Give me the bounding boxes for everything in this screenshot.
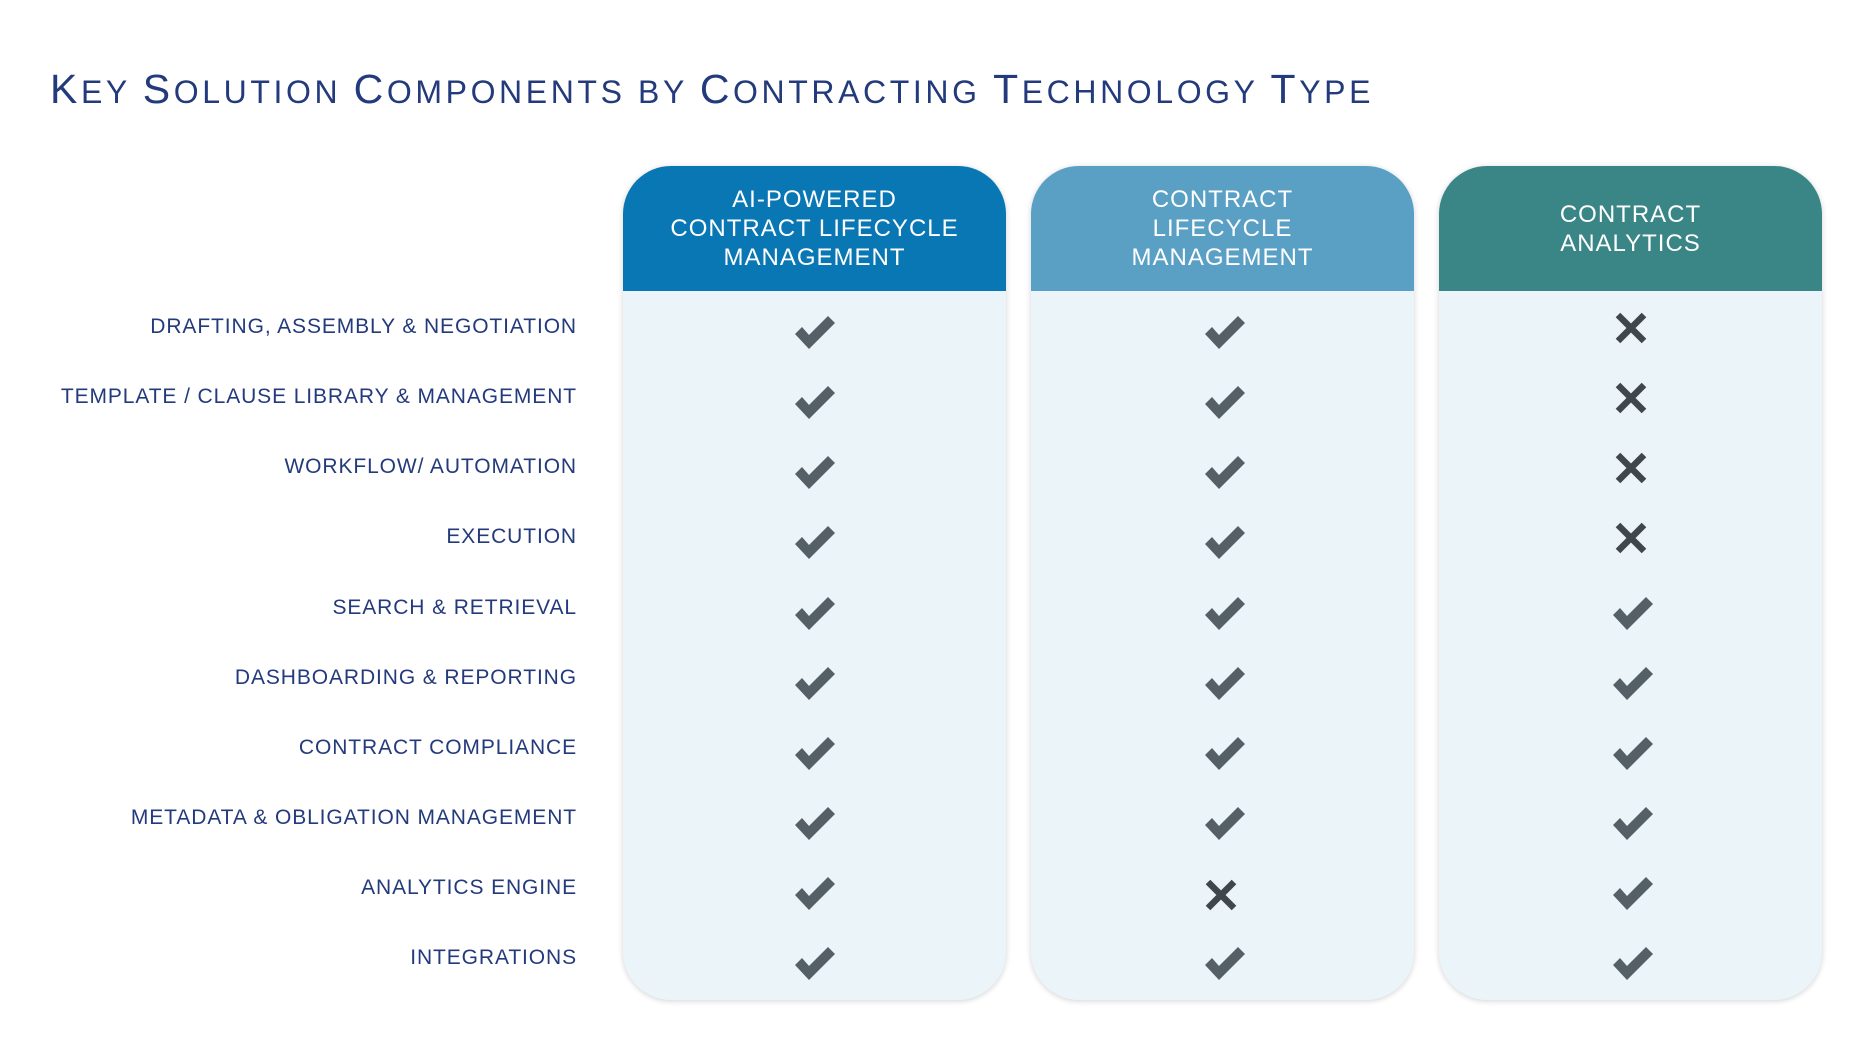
row labels: DASHBOARDING & REPORTING	[235, 666, 577, 689]
row labels: CONTRACT COMPLIANCE	[299, 736, 577, 759]
title: KEY SOLUTION COMPONENTS BY CONTRACTING TECHNOLOGY TYPE	[50, 66, 1374, 112]
panel: AI-powered CLM	[623, 166, 1006, 1000]
panel: CLM	[1031, 166, 1414, 1000]
panel: AI-powered CLM: CONTRACT LIFECYCLE	[670, 215, 959, 242]
row labels: DRAFTING, ASSEMBLY & NEGOTIATION	[150, 315, 577, 338]
panel: contract analytics: CONTRACT	[1560, 200, 1701, 228]
row labels: SEARCH & RETRIEVAL	[332, 596, 577, 619]
panel: AI-powered CLM: AI-POWERED	[732, 186, 897, 213]
panel: CLM: MANAGEMENT	[1131, 244, 1314, 271]
row labels: EXECUTION	[446, 525, 577, 548]
panel: CLM: LIFECYCLE	[1153, 215, 1292, 242]
row labels: WORKFLOW/ AUTOMATION	[284, 455, 577, 478]
row labels	[61, 315, 577, 969]
panel: CLM: CONTRACT	[1152, 186, 1293, 213]
row labels: INTEGRATIONS	[410, 946, 577, 969]
panel: contract analytics: ANALYTICS	[1560, 230, 1701, 256]
panel: AI-powered CLM: MANAGEMENT	[723, 244, 906, 271]
row labels: ANALYTICS ENGINE	[361, 876, 577, 899]
row labels: TEMPLATE / CLAUSE LIBRARY & MANAGEMENT	[61, 385, 577, 408]
row labels: METADATA & OBLIGATION MANAGEMENT	[131, 806, 577, 829]
panel: contract analytics	[1439, 166, 1822, 1000]
